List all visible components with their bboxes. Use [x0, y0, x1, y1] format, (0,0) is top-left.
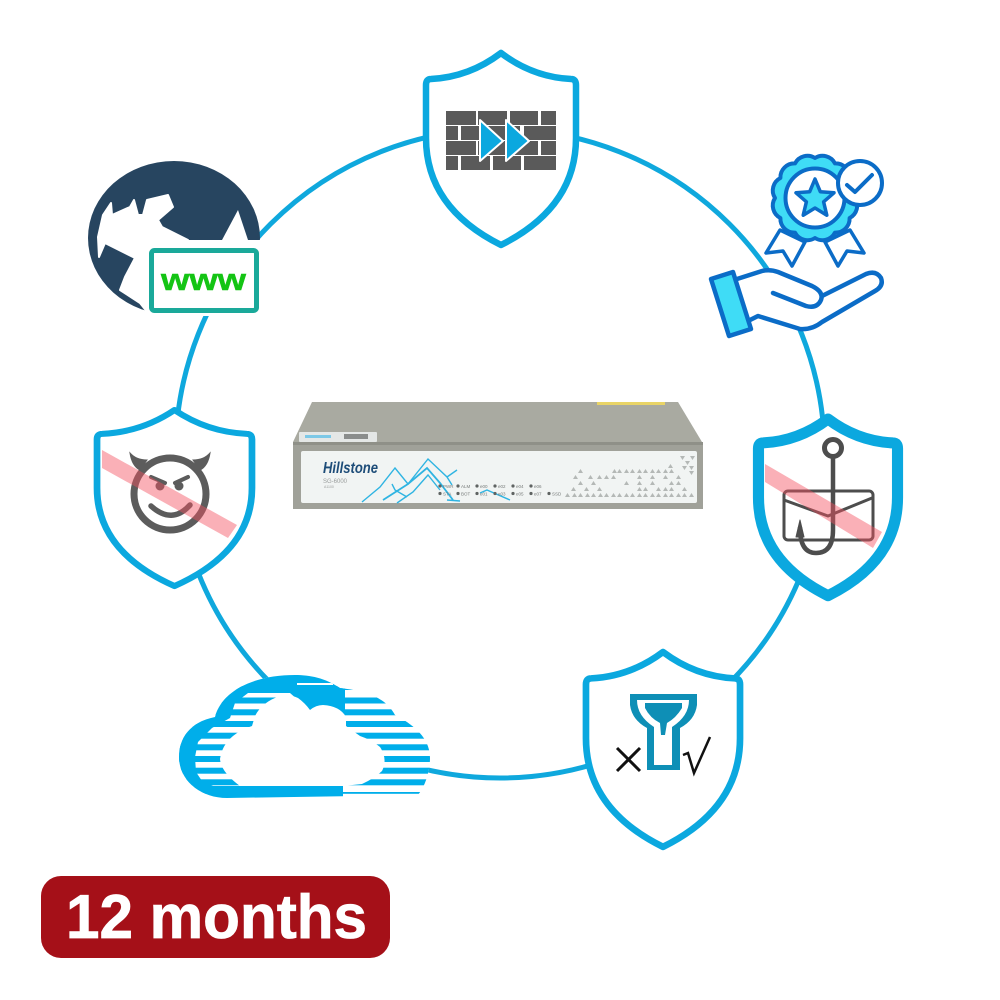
- central device: Hillstone appliance: [293, 402, 703, 509]
- ribbons: [766, 230, 864, 266]
- central device: Hillstone appliance: e04: [516, 484, 524, 489]
- open hand: [737, 270, 882, 329]
- icon: check mark: [683, 737, 710, 773]
- icon: striped cloud: [179, 675, 430, 798]
- central device: Hillstone appliance: PWR: [443, 484, 454, 489]
- badge label: 12 months: [66, 883, 367, 952]
- central device: Hillstone appliance: SSD: [552, 492, 562, 496]
- central device: Hillstone appliance: SG-6000: [323, 479, 348, 485]
- cuff: [711, 272, 751, 336]
- central device: Hillstone appliance: e02: [498, 484, 506, 489]
- central device: Hillstone appliance: BOT: [461, 492, 471, 496]
- icon: hook and envelope: [784, 440, 873, 553]
- central device: Hillstone appliance: ALM: [461, 484, 471, 489]
- www label: www: [160, 262, 247, 297]
- shield: firewall: [426, 53, 576, 245]
- central device: Hillstone appliance: Hillstone: [323, 460, 378, 477]
- icon: award on hand: [711, 156, 882, 336]
- icon: globe with www box: [88, 161, 262, 316]
- icon: fast-forward arrows: [480, 120, 529, 161]
- shield: anti-phishing: [758, 419, 898, 596]
- ring connecting services: [176, 129, 824, 778]
- icon: funnel filter: [630, 694, 697, 770]
- prohibition band: [102, 450, 237, 538]
- icon: devil face: [130, 453, 210, 530]
- icon: cross mark: [617, 748, 640, 771]
- central device: Hillstone appliance: e00: [480, 484, 488, 489]
- central device: Hillstone appliance: A1100: [324, 485, 334, 489]
- prohibition band: [765, 464, 882, 548]
- www box: [152, 250, 256, 310]
- shield: anti-malware: [97, 410, 252, 586]
- scalloped badge: [773, 156, 857, 240]
- infographic: security services ring: [41, 50, 904, 958]
- icon: brick wall: [446, 111, 556, 170]
- check mark seal: [838, 161, 882, 205]
- central device: Hillstone appliance: e03: [498, 492, 506, 496]
- central device: Hillstone appliance: e07: [534, 492, 542, 496]
- central device: Hillstone appliance: e05: [516, 492, 524, 496]
- central device: Hillstone appliance: e06: [534, 484, 542, 489]
- central device: Hillstone appliance: STA: [443, 492, 451, 496]
- duration badge: [41, 876, 390, 958]
- central device: Hillstone appliance: e01: [480, 492, 488, 496]
- shield: URL filtering: [586, 652, 740, 847]
- star: [796, 179, 834, 215]
